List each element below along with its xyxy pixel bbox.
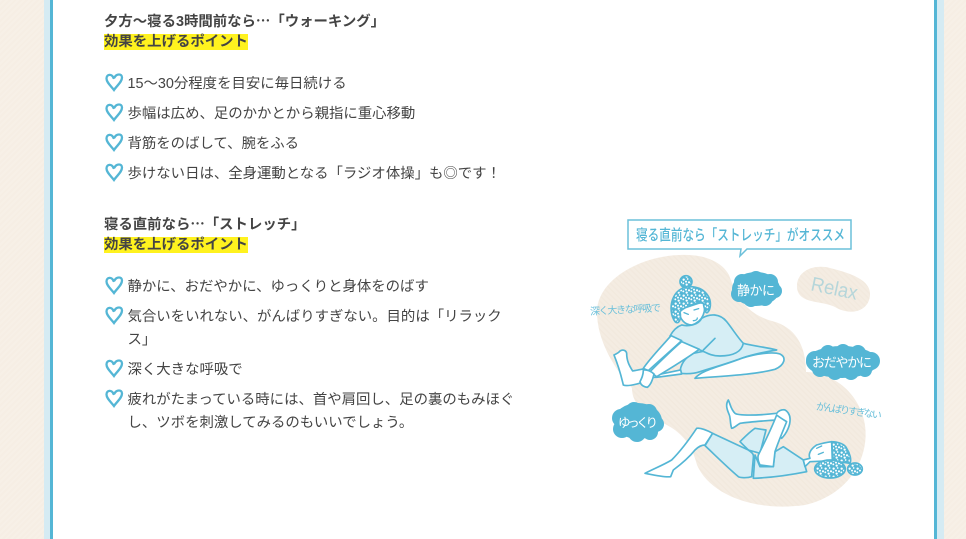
list item: walking 2: 歩幅は広め、足のかかとから親指に重心移動 [128,106,415,122]
list item: stretch 4 [105,389,514,431]
list item: stretch 3: 深く大きな呼吸で [128,362,243,378]
callout: recommendation [628,220,851,256]
list item: stretch 4: し、ツボを刺激してみるのもいいでしょう。 [128,415,413,431]
label: do not overdo: がんばりすぎない [815,400,883,422]
label: Relax: Relax [809,273,860,305]
list item: stretch 2: ス」 [128,332,156,348]
heading: walking: 効果を上げるポイント [104,34,248,50]
heading: stretch: 寝る直前なら…「ストレッチ」 [104,213,306,234]
blob: beige background [597,255,866,507]
heading: walking [104,10,385,50]
heading: walking: 夕方〜寝る3時間前なら…「ウォーキング」 [104,10,385,31]
bubble: calmly [806,344,880,380]
callout: recommendation: 寝る直前なら「ストレッチ」がオススメ [636,226,845,244]
bubble: quietly: 静かに [737,283,775,298]
bubble: slowly [612,402,664,442]
list item: stretch 4: 疲れがたまっている時には、首や肩回し、足の裏のもみほぐ [128,392,514,408]
list item: stretch 2: 気合いをいれない、がんばりすぎない。目的は「リラック [128,308,502,324]
list item: stretch 2 [105,306,502,348]
list item: walking 3: 背筋をのばして、腕をふる [128,136,299,152]
figure: lying stretch [645,400,862,478]
bubble: quietly [731,271,782,307]
bubble: slowly: ゆっくり [618,416,658,430]
label: deep breathing: 深く大きな呼吸で [590,301,661,318]
heading: stretch [104,213,306,253]
list item: stretch 1: 静かに、おだやかに、ゆっくりと身体をのばす [128,278,429,294]
list item: walking 4: 歩けない日は、全身運動となる「ラジオ体操」も◎です！ [128,166,501,182]
list item: walking 1: 15〜30分程度を目安に毎日続ける [128,76,347,92]
blob: relax [797,267,870,312]
bubble: calmly: おだやかに [812,355,872,370]
heading: stretch: 効果を上げるポイント [104,237,248,253]
figure: seated stretch [614,276,784,387]
